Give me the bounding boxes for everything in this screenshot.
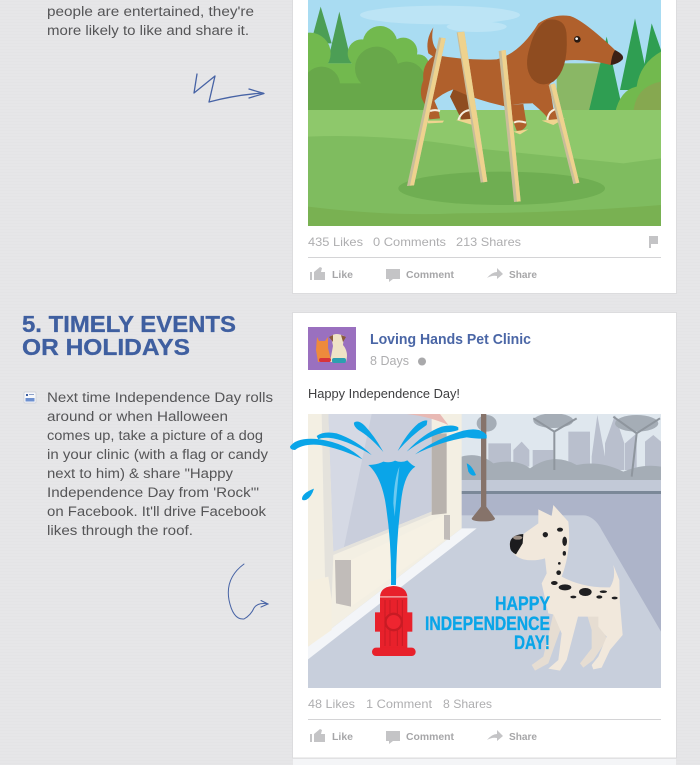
action bar — [310, 267, 537, 282]
intro text continued: more likely to like and share it. — [47, 23, 249, 38]
dalmatian far legs — [532, 613, 607, 671]
arrow: squiggle pointing to post — [194, 74, 264, 102]
illustration: dalmatian and hydrant — [290, 413, 661, 688]
icon: flag — [649, 236, 658, 248]
tail — [427, 27, 437, 58]
illustration text: INDEPENDENCE — [425, 613, 550, 635]
stats row: 1 Comment — [366, 697, 433, 711]
action bar — [310, 729, 537, 744]
intro text continued — [47, 4, 254, 38]
stats row: 213 Shares — [456, 235, 521, 249]
clinic name: Loving Hands Pet Clinic — [370, 331, 531, 348]
water jet — [290, 420, 487, 585]
stats row — [308, 697, 492, 711]
action bar: Share — [509, 731, 537, 743]
action bar: Like — [332, 269, 353, 281]
stats row: 435 Likes — [308, 235, 363, 249]
heading: 5. Timely events or holidays: OR HOLIDAYS — [22, 334, 190, 360]
body text: next to him) & share "Happy — [47, 466, 233, 481]
icon: calendar bullet — [24, 392, 36, 403]
hydrant — [380, 586, 407, 597]
body text — [47, 390, 273, 538]
illustration text: HAPPY — [495, 593, 550, 615]
action bar: Comment — [406, 269, 454, 281]
stats row: 8 Shares — [443, 697, 492, 711]
body text: around or when Halloween — [47, 409, 228, 424]
avatar — [308, 327, 356, 370]
arrow: curved pointing to post — [228, 564, 268, 619]
heading: 5. Timely events or holidays: 5. TIMELY EVENTS — [22, 311, 236, 337]
heading: 5. Timely events or holidays — [22, 311, 236, 360]
stats row — [308, 235, 521, 249]
comment strip — [293, 759, 676, 765]
body text: in your clinic (with a flag or candy — [47, 447, 268, 462]
stats row: 0 Comments — [373, 235, 446, 249]
illustration: dachshund on stilts — [289, 0, 661, 226]
body text: Next time Independence Day rolls — [47, 390, 273, 405]
dog body and head — [423, 15, 615, 106]
front legs — [503, 104, 527, 131]
body text: Independence Day from 'Rock'" — [47, 485, 259, 500]
panel: Independence Day post — [290, 312, 676, 758]
panel: dog on stilts post — [289, 0, 676, 294]
body text: on Facebook. It'll drive Facebook — [47, 504, 266, 519]
body text: comes up, take a picture of a dog — [47, 428, 263, 443]
date: 8 Days — [370, 353, 409, 368]
near hind leg — [421, 80, 440, 119]
action bar: Like — [332, 731, 353, 743]
dalmatian near legs — [548, 603, 623, 671]
action bar: Comment — [406, 731, 454, 743]
intro text continued: people are entertained, they're — [47, 4, 254, 19]
far hind leg — [450, 90, 470, 120]
illustration text: DAY! — [514, 632, 550, 654]
body text: likes through the roof. — [47, 523, 193, 538]
stats row: 48 Likes — [308, 697, 355, 711]
illustration text — [425, 593, 550, 654]
dalmatian body — [510, 505, 620, 617]
post caption: Happy Independence Day! — [308, 386, 460, 401]
building — [308, 414, 462, 647]
icon: globe — [418, 358, 426, 366]
action bar: Share — [509, 269, 537, 281]
